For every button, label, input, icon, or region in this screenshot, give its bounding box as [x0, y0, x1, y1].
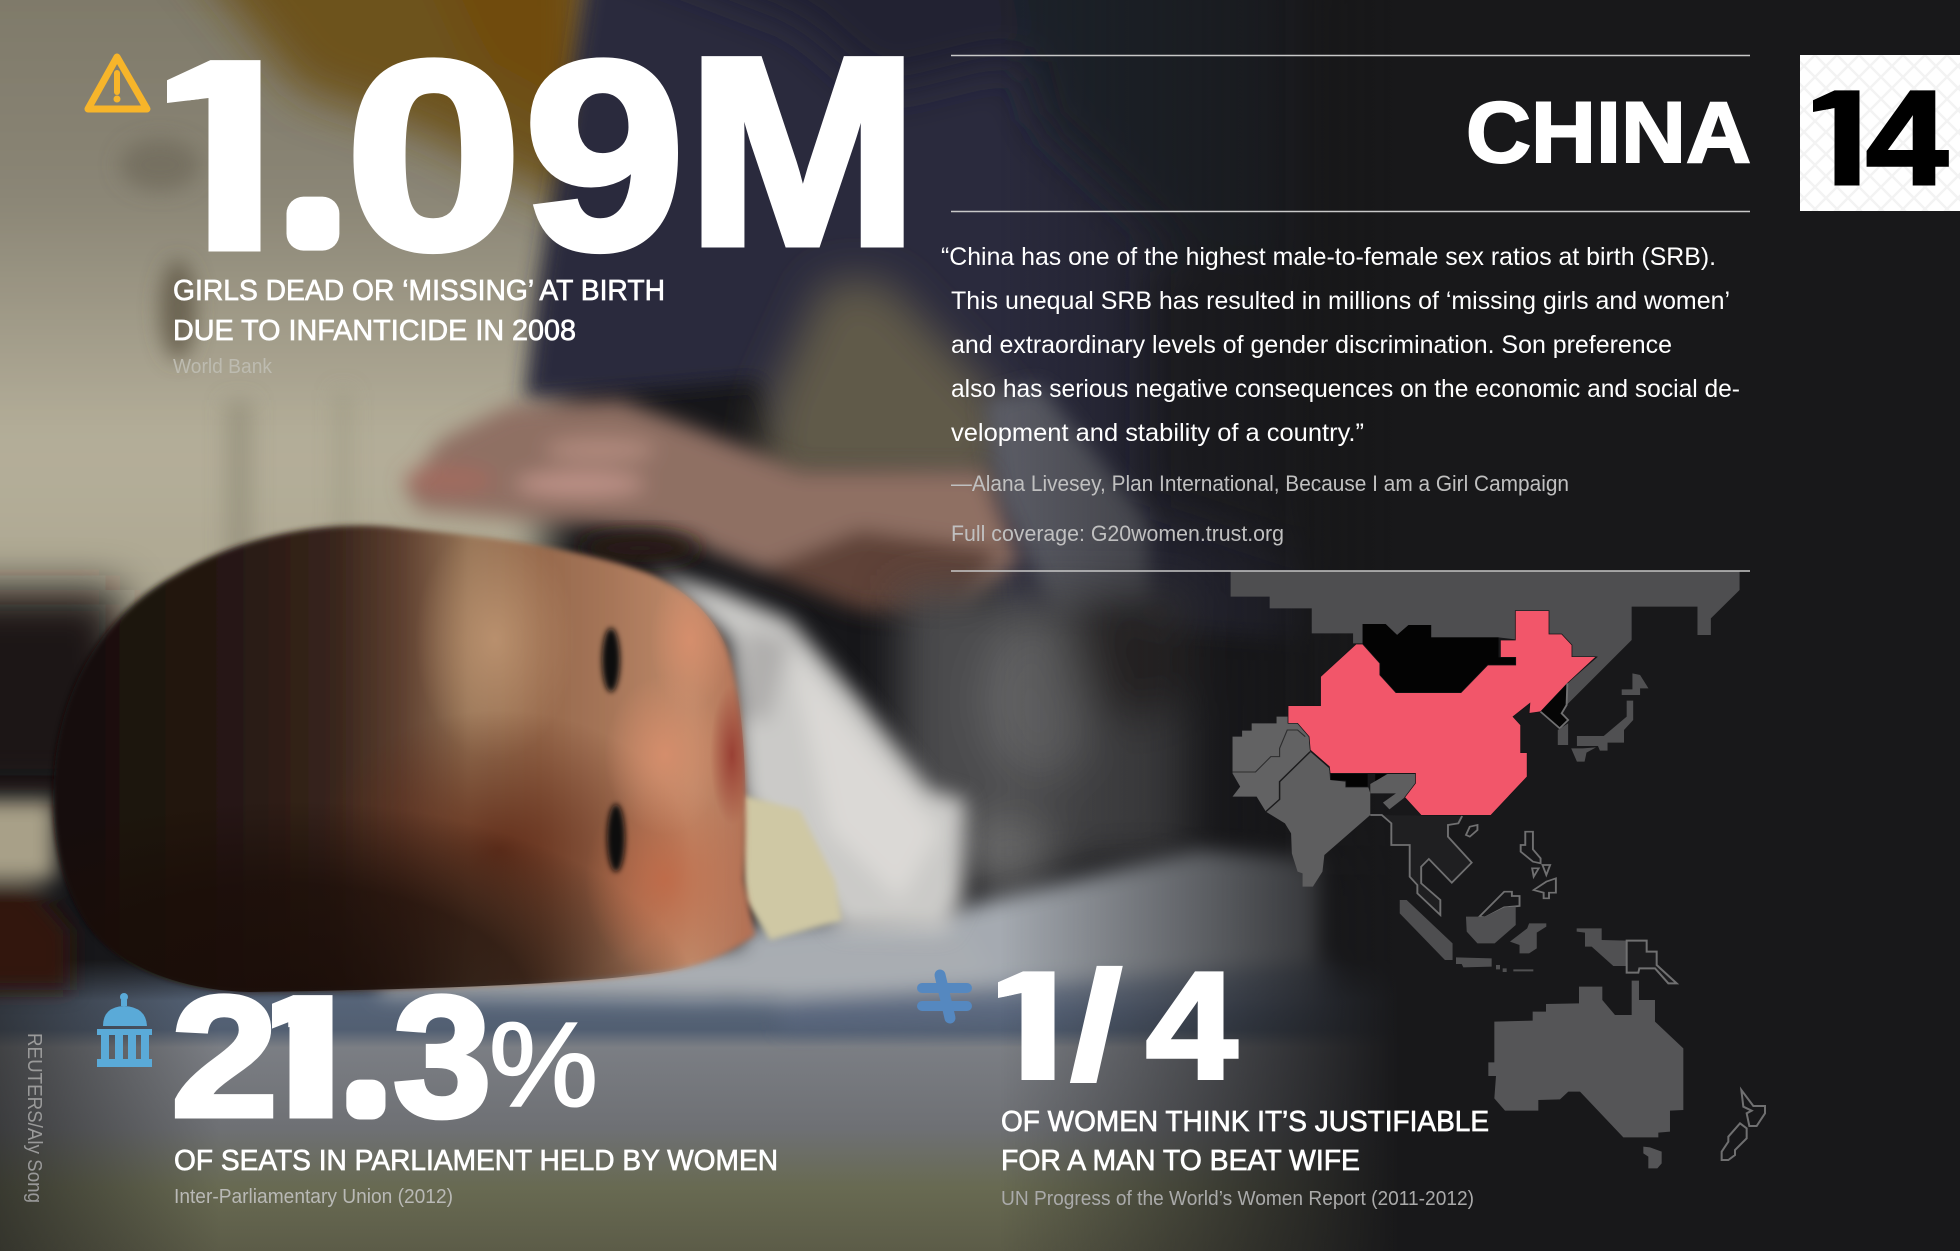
caption: justifiable to beat wife: OF WOMEN THINK IT’S JUSTIFIABLE — [1001, 1106, 1489, 1138]
quote text block: also has serious negative consequences on the economic and social de- — [951, 375, 1740, 403]
big number 1.09M — [167, 56, 904, 254]
rank badge: 1 — [1790, 62, 1894, 213]
map: Sulawesi — [1510, 923, 1546, 953]
quote text block: velopment and stability of a country.” — [951, 419, 1364, 447]
map: China — [1288, 611, 1596, 815]
quote text block: This unequal SRB has resulted in millions of ‘missing girls and women’ — [951, 287, 1730, 315]
source: World Bank: World Bank — [173, 356, 273, 378]
panel: main statistic — [88, 1, 919, 378]
photo: baby head — [53, 525, 755, 992]
photo: onesie cuff — [742, 795, 842, 940]
photo: shadow under hand — [580, 534, 700, 562]
map: Tasmania — [1643, 1147, 1662, 1168]
photo: right fade — [1000, 0, 1400, 1251]
photo: grey background right of arm — [900, 590, 1200, 905]
photo: adult white sleeve — [985, 385, 1150, 625]
photo: floor and blanket — [0, 960, 1960, 1251]
source: UN Progress report: UN Progress of the World’s Women Report (2011-2012) — [1001, 1188, 1474, 1210]
caption: girls dead or missing: GIRLS DEAD OR ‘MISSING’ AT BIRTH — [173, 275, 665, 307]
photo: dark left band — [0, 590, 120, 790]
map: India — [1266, 752, 1370, 887]
quote text block: “China has one of the highest male-to-female sex ratios at birth (SRB). — [941, 243, 1716, 271]
map: Philippines — [1521, 832, 1556, 898]
caption: justifiable to beat wife: FOR A MAN TO BEAT WIFE — [1001, 1145, 1360, 1177]
map: South East Asia outline — [1370, 815, 1472, 915]
map: Central Asia — [1233, 717, 1310, 812]
map: Nepal and Bhutan gaps — [1331, 774, 1386, 787]
divider lines — [951, 56, 1750, 571]
big number 21.3%: . — [354, 1029, 378, 1125]
big number 1/4: 1 — [969, 942, 1096, 1111]
map: Papua New Guinea outline — [1627, 941, 1677, 983]
caption: girls dead or missing — [173, 275, 665, 347]
map: Indonesian islands — [1456, 957, 1533, 972]
photo: navy sleeve — [525, 0, 1320, 640]
quote text block: and extraordinary levels of gender discrimination. Son preference — [951, 331, 1672, 359]
big number 1/4: 4 — [1146, 941, 1237, 1111]
photo: beige wedge behind hand — [755, 280, 1010, 490]
rank badge — [1790, 55, 1960, 213]
map: Mongolia — [1363, 624, 1516, 693]
photo: dark right side — [1300, 0, 1960, 860]
icon: capitol dome — [97, 993, 152, 1067]
map: Malaysia outline — [1479, 892, 1520, 917]
full coverage link: Full coverage: G20women.trust.org — [951, 521, 1284, 546]
source: Inter-Parliamentary Union: Inter-Parliamentary Union (2012) — [174, 1186, 453, 1208]
icon: not equal sign — [922, 975, 967, 1018]
map: Russia — [1231, 572, 1740, 705]
panel: violence statistic — [922, 940, 1489, 1210]
map: New Zealand — [1722, 1090, 1765, 1160]
big number 21.3%: 2 — [171, 961, 278, 1153]
photo credit: REUTERS/Aly Song — [23, 1033, 45, 1203]
icon: warning triangle — [88, 57, 147, 109]
map: Papua — [1577, 928, 1627, 966]
big number 1/4: / — [1071, 940, 1122, 1111]
quote text block — [941, 243, 1740, 447]
big number 21.3%: 1 — [228, 960, 381, 1153]
big number 1.09M: M — [686, 1, 919, 301]
photo: gold curtain — [180, 0, 590, 210]
big number 1/4 — [969, 940, 1237, 1111]
caption: seats in parliament: OF SEATS IN PARLIAMENT HELD BY WOMEN — [174, 1145, 778, 1177]
map: Japan — [1571, 673, 1648, 762]
photo: onesie — [650, 570, 965, 932]
photo: adult hand — [405, 400, 1020, 617]
map: Sumatra — [1400, 900, 1453, 960]
photo: face shading — [78, 548, 746, 992]
big number 1.09M: . — [294, 114, 332, 263]
photo: cream wall — [0, 0, 640, 660]
big number 1.09M: 1 — [122, 6, 330, 306]
map: Myanmar — [1370, 774, 1415, 809]
map: Koreas — [1541, 683, 1568, 728]
panel: parliament statistic: % — [489, 998, 598, 1132]
caption: girls dead or missing: DUE TO INFANTICIDE IN 2008 — [173, 315, 576, 347]
photo: baby eyes — [602, 628, 625, 872]
big number 21.3% — [174, 993, 488, 1120]
big number 1.09M: 0 — [345, 6, 522, 305]
quote attribution: —Alana Livesey, Plan International, Because I am a Girl Campaign — [951, 471, 1569, 496]
big number 1.09M: 9 — [524, 7, 685, 306]
big number 21.3%: 3 — [393, 960, 492, 1152]
country name: CHINA — [1466, 85, 1751, 181]
caption: justifiable to beat wife — [1001, 1106, 1489, 1177]
map of Asia and Oceania — [1231, 572, 1765, 1168]
panel: country header — [951, 55, 1960, 571]
map: Australia — [1488, 981, 1683, 1137]
photo: cream patch and hand bottom left — [0, 800, 70, 990]
map: Borneo — [1466, 907, 1516, 943]
panel: parliament statistic — [97, 960, 778, 1208]
rank badge: 4 — [1866, 62, 1948, 213]
